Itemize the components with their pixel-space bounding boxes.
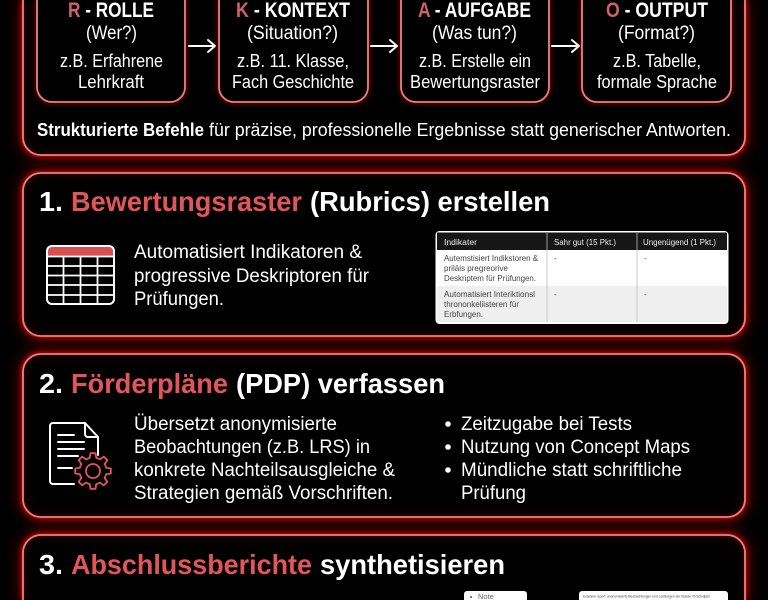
table: rubric example: Sahr gut (15 Pkt.) (554, 238, 616, 247)
table: rubric example: - (554, 290, 557, 299)
list: compensation measures: Prüfung (461, 483, 526, 504)
panel: Abschlussberichte (23, 535, 745, 600)
text block: rubric description: progressive Deskriptoren für (134, 266, 370, 287)
step card: Rolle: (Wer?) (86, 23, 137, 44)
heading: Bewertungsraster: (Rubrics) erstellen (310, 186, 550, 217)
heading: Förderpläne: (PDP) verfassen (236, 368, 445, 399)
card: notes (464, 591, 527, 600)
heading: Förderpläne (39, 368, 445, 399)
panel: Bewertungsraster (23, 173, 745, 336)
heading: Bewertungsraster: Bewertungsraster (71, 186, 302, 217)
step card: Kontext: z.B. 11. Klasse, (237, 51, 349, 71)
text block: PDP description: Beobachtungen (z.B. LRS) in (134, 437, 370, 458)
summary text: für präzise, professionelle Ergebnisse statt generischer Antworten. (209, 120, 731, 140)
icon: document with gear (50, 423, 111, 489)
step card: Output: z.B. Tabelle, (613, 51, 701, 71)
heading: Bewertungsraster: 1. (39, 186, 63, 217)
table: rubric example: Erbfungen. (444, 310, 483, 319)
table: rubric example: Autemstisiert Indikstoren & (444, 254, 539, 263)
heading: Abschlussberichte: synthetisieren (320, 549, 505, 580)
step card: Rolle: Lehrkraft (78, 72, 144, 92)
text block: PDP description: konkrete Nachteilsausgleiche & (134, 460, 395, 481)
heading: Bewertungsraster (39, 186, 550, 217)
heading: Abschlussberichte: Abschlussberichte (71, 549, 312, 580)
step card: Rolle: z.B. Erfahrene (60, 51, 163, 71)
step card: Aufgabe: Bewertungsraster (410, 72, 540, 92)
arrow: Aufgabe to Output (552, 40, 579, 52)
table: rubric example: Indikater (444, 238, 477, 247)
heading: Förderpläne: Förderpläne (71, 368, 228, 399)
summary text: Strukturierte Befehle (37, 120, 204, 140)
arrow: Kontext to Aufgabe (371, 40, 397, 52)
table: rubric example: - (644, 290, 647, 299)
step card: Output (582, 0, 731, 102)
text block: PDP description: Strategien gemäß Vorschriften. (134, 483, 393, 504)
card: final report (579, 591, 728, 600)
step card: Kontext: Fach Geschichte (232, 72, 354, 92)
panel: Förderpläne (23, 354, 745, 517)
card: final report: Example report: anonymisierte Beobachtungen und Leistungen der Klasse im Schuljahr (583, 594, 711, 598)
text block: PDP description: Übersetzt anonymisierte (134, 414, 337, 435)
arrow: Rolle to Kontext (189, 40, 215, 52)
table: rubric example: thrononkeliisteren für (444, 300, 519, 309)
heading: Abschlussberichte: 3. (39, 549, 63, 580)
table: rubric example: Automatisiert Interiktionsl (444, 290, 535, 299)
step card: Rolle (37, 0, 185, 102)
list: compensation measures: Mündliche statt schriftliche (461, 460, 682, 481)
list: compensation measures (445, 414, 690, 504)
step card: Aufgabe: z.B. Erstelle ein (419, 51, 531, 71)
table: rubric example: - (644, 254, 647, 263)
heading: Abschlussberichte (39, 549, 505, 580)
list: compensation measures: Nutzung von Concept Maps (461, 437, 690, 458)
step card: Aufgabe: (Was tun?) (432, 23, 517, 44)
table: rubric example: - (554, 254, 557, 263)
panel: RKAO framework (23, 0, 745, 155)
text block: rubric description: Automatisiert Indikatoren & (134, 242, 362, 263)
list: compensation measures: Zeitzugabe bei Tests (461, 414, 632, 435)
step card: Output: formale Sprache (597, 72, 717, 92)
table: rubric example: Deskriptem für Prüfungen. (444, 274, 536, 283)
text block: rubric description (134, 242, 370, 310)
table: rubric example: priläis pregreorive (444, 264, 509, 273)
step card: Kontext (219, 0, 368, 102)
step card: Kontext: (Situation?) (247, 23, 338, 44)
step card: Aufgabe (401, 0, 549, 102)
step card: Output: (Format?) (618, 23, 695, 44)
table: rubric example: Ungenügend (1 Pkt.) (643, 238, 716, 247)
icon: table (47, 246, 114, 304)
table: rubric example (436, 231, 728, 324)
heading: Förderpläne: 2. (39, 368, 63, 399)
text block: PDP description (134, 414, 395, 504)
text block: rubric description: Prüfungen. (134, 289, 224, 310)
